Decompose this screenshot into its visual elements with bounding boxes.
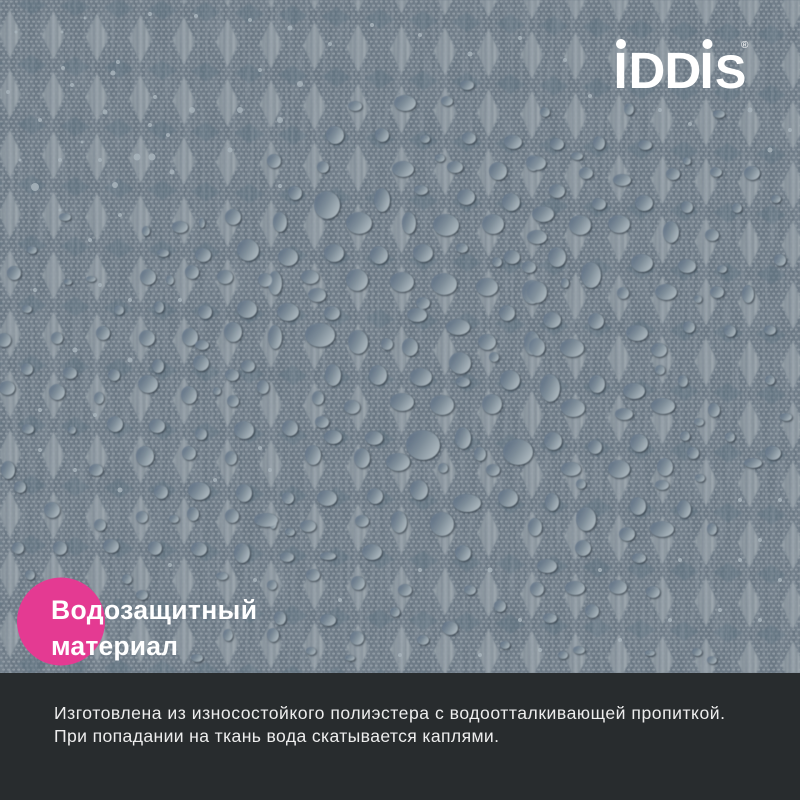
logo: IDDIS: S — [715, 45, 746, 98]
heading: Водозащитный — [51, 595, 257, 625]
pink accent circle — [17, 578, 105, 666]
heading: материал — [51, 631, 178, 661]
description text: Изготовлена из износостойкого полиэстера с водоотталкивающей пропиткой. — [54, 703, 725, 723]
logo: IDDIS: IDDI — [614, 42, 714, 99]
description text: При попадании на ткань вода скатывается каплями. — [54, 726, 499, 746]
footer band — [0, 673, 800, 800]
logo: IDDIS: ® — [741, 40, 749, 51]
tiny droplets — [6, 12, 792, 657]
water droplets — [0, 80, 792, 664]
heading — [51, 595, 257, 661]
description text — [54, 703, 725, 746]
